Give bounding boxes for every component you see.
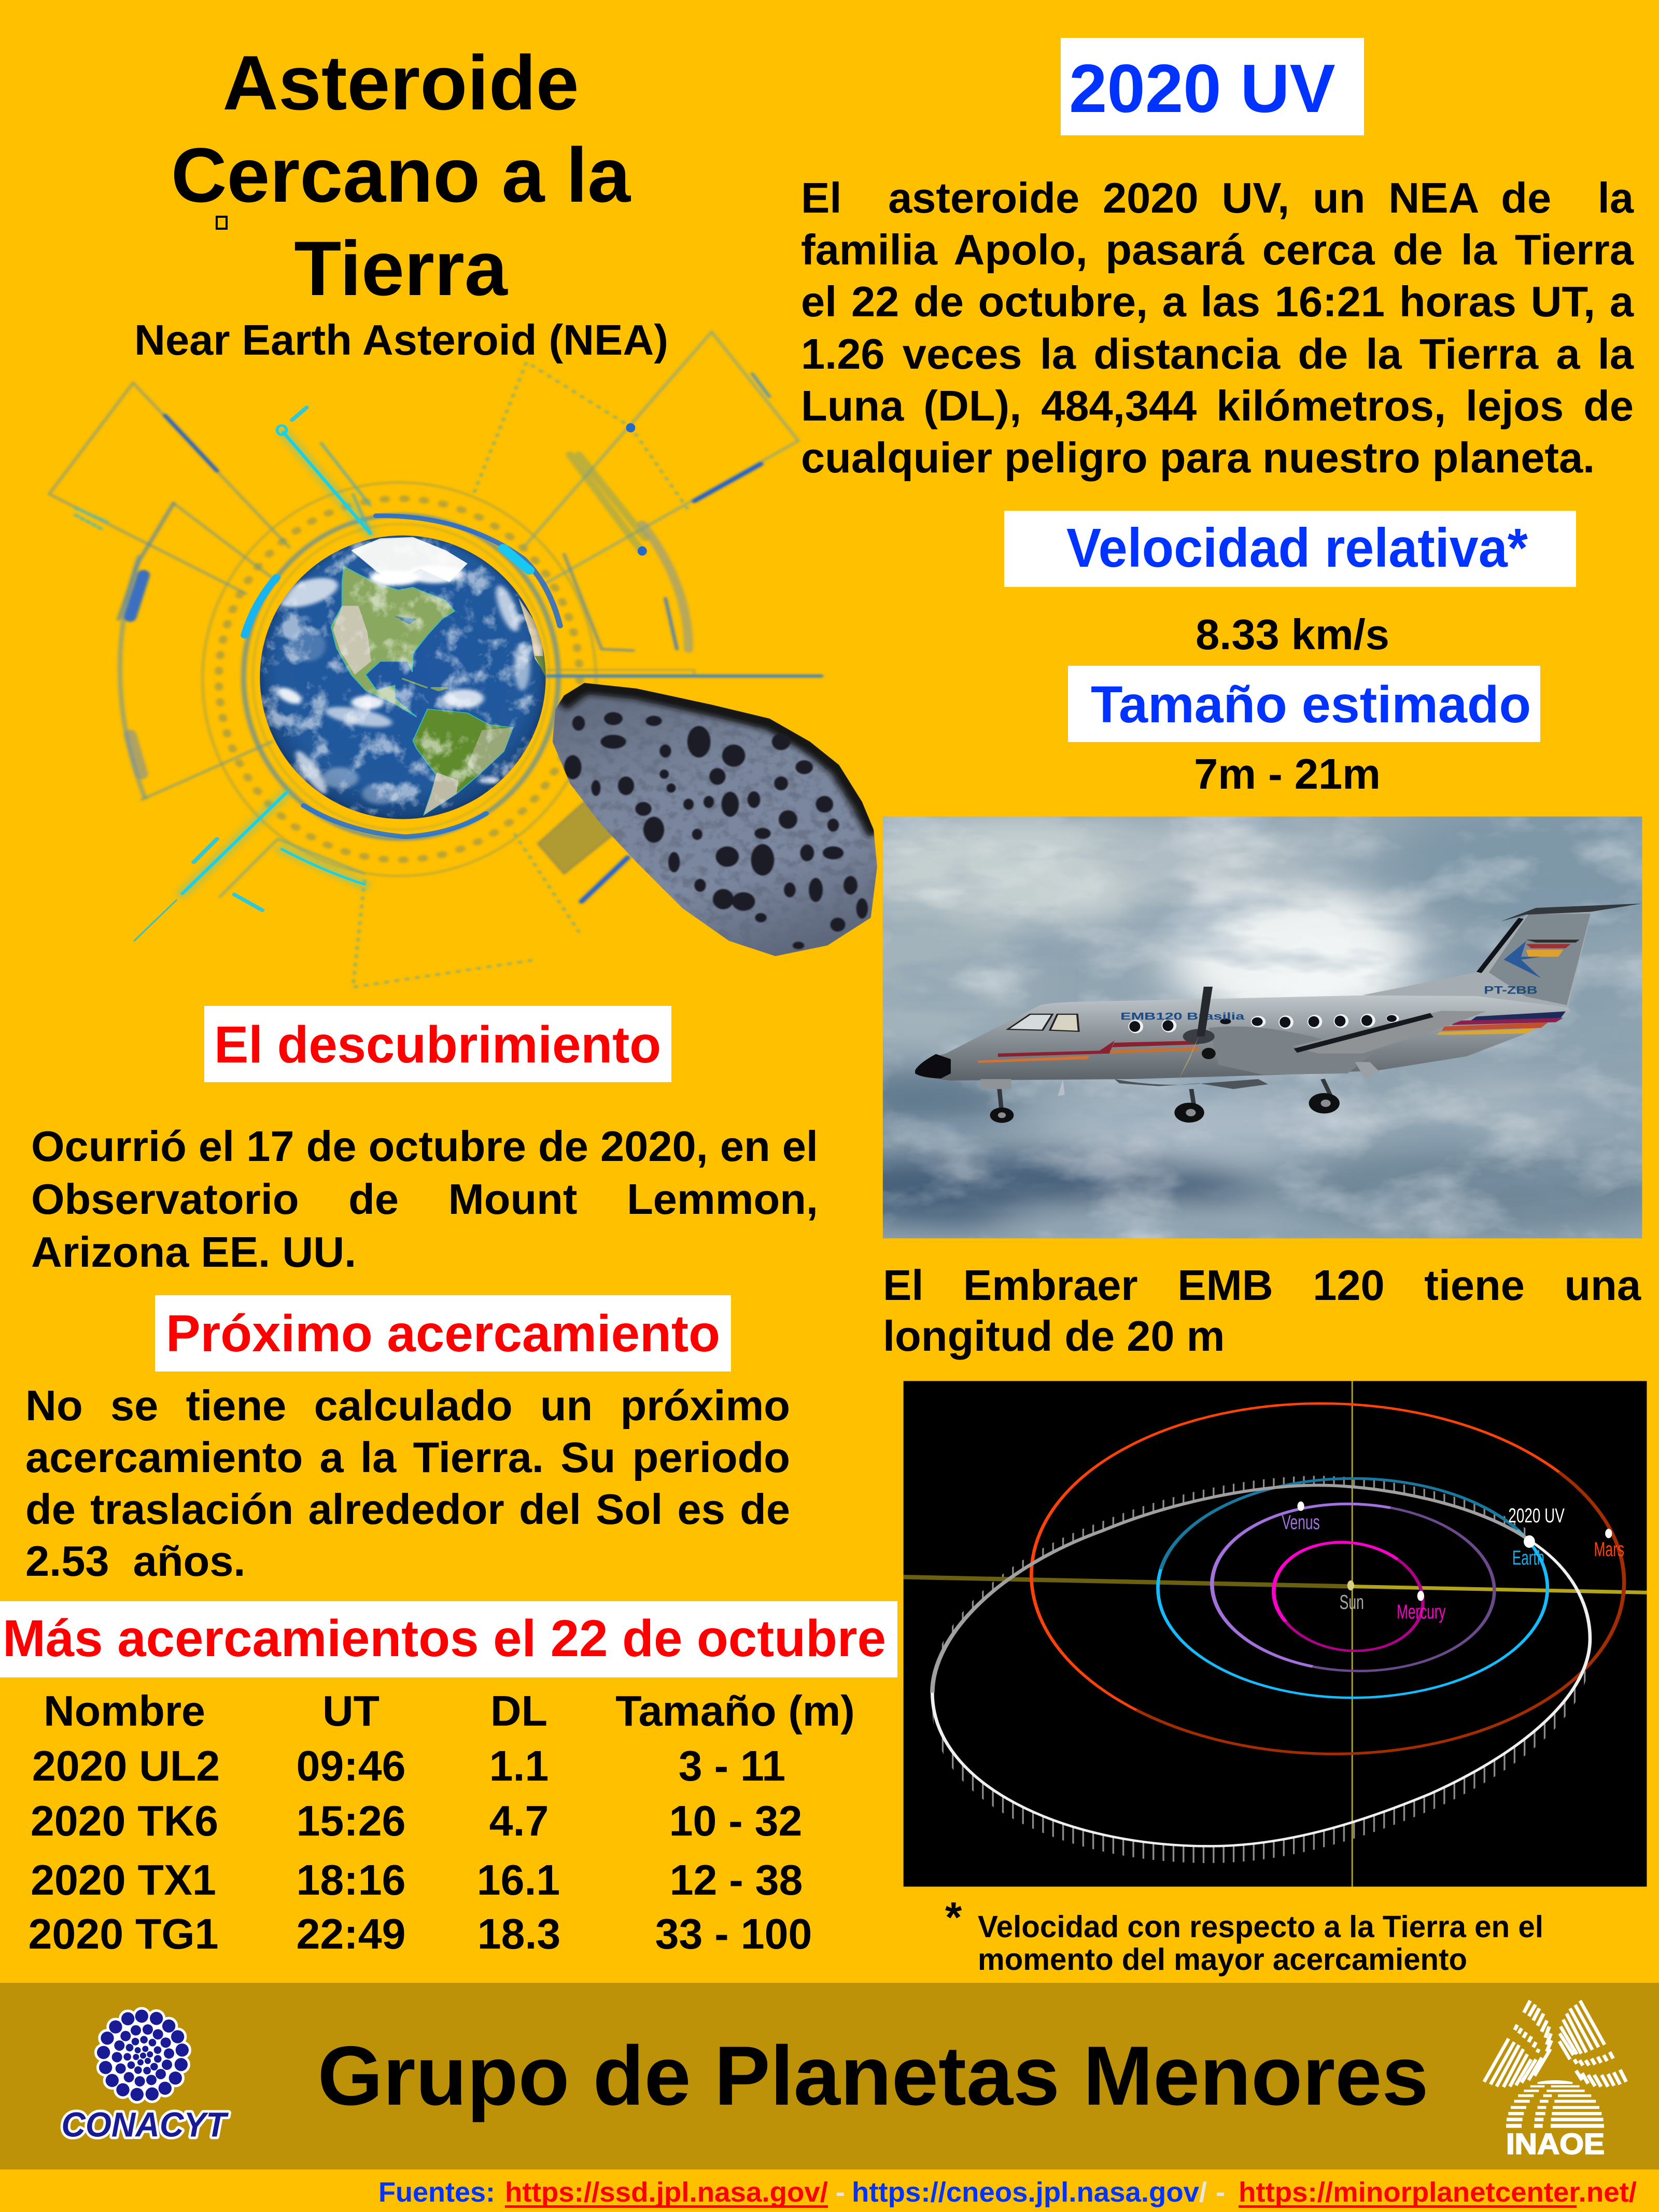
text block: next approach: No se tiene calculado un próximo	[25, 1381, 790, 1430]
row: 2020 TK6	[31, 1797, 802, 1845]
row: 2020 UL2	[32, 1742, 785, 1790]
heading: 2020 UV: 2020 UV	[1069, 50, 1335, 127]
orbit labels: Sun	[1340, 1591, 1364, 1614]
value: size: 7m - 21m	[1194, 750, 1381, 798]
subtitle: Near Earth Asteroid (NEA)	[134, 316, 668, 364]
row: 2020 UL2: 09:46	[296, 1742, 406, 1790]
text block: discovery: Observatorio de Mount Lemmon,	[31, 1175, 818, 1223]
stray placeholder glyph box	[217, 217, 227, 229]
heading: Velocidad relativa: Velocidad relativa*	[1066, 517, 1528, 579]
logo: INAOE	[1484, 2000, 1626, 2161]
value: velocity: 8.33 km/s	[1196, 610, 1389, 659]
logo dome stripes	[1506, 2080, 1604, 2128]
table header: DL	[490, 1687, 547, 1735]
orbit labels: Mercury	[1397, 1601, 1446, 1623]
orbit labels	[1282, 1504, 1624, 1623]
aircraft	[915, 904, 1641, 1123]
aircraft: PT-ZBB	[1484, 984, 1538, 996]
title: Cercano a la	[171, 132, 631, 218]
craters	[564, 712, 868, 949]
row: 2020 TX1: 18:16	[296, 1856, 406, 1904]
row: 2020 TG1: 33 - 100	[655, 1910, 812, 1958]
logo dots	[97, 2010, 189, 2101]
orbit: Earth	[1158, 1478, 1548, 1698]
text block: 2020 UV description: el 22 de octubre, a las 16:21 horas UT, a	[801, 277, 1634, 326]
row: 2020 TG1: 22:49	[296, 1910, 406, 1958]
landing gear	[1000, 1079, 1330, 1109]
clouds	[271, 537, 530, 804]
text block: 2020 UV description: familia Apolo, pasará cerca de la Tierra	[801, 226, 1634, 274]
footnote: Velocidad con respecto a la Tierra en el	[978, 1910, 1543, 1944]
rock texture	[553, 687, 876, 956]
title: Tierra	[294, 225, 508, 312]
row: 2020 TK6: 4.7	[489, 1797, 549, 1845]
logo wordmark: CONACYT	[61, 2106, 229, 2145]
caption: aircraft length	[883, 1261, 1641, 1360]
heading: Velocidad relativa	[1004, 511, 1576, 587]
row: 2020 UL2: 2020 UL2	[32, 1742, 220, 1790]
text block: next approach	[25, 1381, 790, 1585]
orbit labels: 2020 UV	[1508, 1504, 1565, 1527]
sources line: -	[1216, 2177, 1225, 2208]
table header: Nombre	[44, 1687, 205, 1735]
photo: Embraer EMB 120 aircraft	[762, 797, 1659, 1241]
icon: asteroid	[544, 677, 885, 964]
table header	[44, 1687, 855, 1735]
asteroid orbit height ticks	[932, 1476, 1590, 1863]
text block: discovery: Ocurrió el 17 de octubre de 2020, en el	[31, 1122, 818, 1170]
row: 2020 TG1	[29, 1910, 812, 1958]
text block: next approach: 2.53 años.	[25, 1537, 245, 1585]
sources line: https://ssd.jpl.nasa.gov/	[505, 2177, 828, 2208]
text block: discovery	[31, 1122, 818, 1276]
chart: orbit diagram	[904, 1381, 1647, 1887]
text block: 2020 UV description	[801, 174, 1634, 482]
footnote: momento del mayor acercamiento	[978, 1942, 1467, 1977]
row: 2020 TX1: 2020 TX1	[31, 1856, 216, 1904]
caption: aircraft length: El Embraer EMB 120 tiene una	[883, 1261, 1641, 1309]
illustration: futuristic HUD around Earth	[49, 332, 822, 987]
orbit: Mars	[1014, 1390, 1641, 1768]
icon: Earth globe	[249, 529, 555, 825]
turbulence cloud texture	[260, 537, 544, 818]
row: 2020 TX1: 12 - 38	[670, 1856, 803, 1904]
row: 2020 TX1	[31, 1856, 803, 1904]
sky clouds	[762, 797, 1659, 1241]
heading: Más acercamientos: Más acercamientos el 22 de octubre	[3, 1609, 886, 1668]
sources line: https://minorplanetcenter.net/	[1239, 2177, 1637, 2208]
sources line	[378, 2177, 1637, 2208]
orbit: Venus	[1198, 1493, 1508, 1682]
continents	[331, 566, 546, 815]
footnote: *	[945, 1893, 962, 1941]
text block: discovery: Arizona EE. UU.	[31, 1228, 356, 1276]
text block: 2020 UV description: cualquier peligro para nuestro planeta.	[801, 433, 1595, 482]
heading: Próximo acercamiento: Próximo acercamiento	[166, 1305, 720, 1363]
logo dots backing	[97, 2010, 189, 2101]
text block: 2020 UV description: El asteroide 2020 UV, un NEA de la	[801, 174, 1634, 222]
footer band	[0, 1983, 1659, 2169]
row: 2020 UL2: 1.1	[489, 1742, 549, 1790]
table header: UT	[322, 1687, 379, 1735]
text block: 2020 UV description: 1.26 veces la distancia de la Tierra a la	[801, 330, 1634, 378]
heading: El descubrimiento: El descubrimiento	[214, 1016, 661, 1074]
row: 2020 TG1: 18.3	[477, 1910, 560, 1958]
heading: 2020 UV	[1061, 38, 1364, 135]
heading: Tamaño estimado: Tamaño estimado	[1091, 676, 1531, 734]
row: 2020 TK6: 2020 TK6	[31, 1797, 218, 1845]
logo wordmark: INAOE	[1506, 2128, 1605, 2161]
title	[171, 39, 631, 312]
table: approaches on 22 October	[29, 1687, 855, 1958]
sources line: https://cneos.jpl.nasa.gov	[852, 2177, 1199, 2208]
HUD rings and frames	[49, 332, 822, 987]
orbit: 2020 UV	[932, 1485, 1590, 1846]
title: Asteroide	[222, 39, 579, 126]
orbit labels: Venus	[1282, 1511, 1320, 1534]
row: 2020 UL2: 3 - 11	[679, 1742, 785, 1790]
orbit labels: Earth	[1512, 1547, 1544, 1569]
HUD glowing cyan and blue arcs	[134, 408, 647, 941]
logo: CONACYT	[61, 2010, 229, 2145]
footnote	[945, 1893, 1543, 1977]
sources line: /	[1199, 2177, 1207, 2208]
row: 2020 TK6: 15:26	[296, 1797, 406, 1845]
row: 2020 TX1: 16.1	[477, 1856, 560, 1904]
chart: orbit diagram: Mars	[1594, 1538, 1624, 1561]
planet markers	[1297, 1502, 1612, 1601]
row: 2020 TG1: 2020 TG1	[29, 1910, 218, 1958]
sources line: -	[836, 2177, 845, 2208]
caption: aircraft length: longitud de 20 m	[883, 1312, 1225, 1360]
text block: next approach: de traslación alrededor del Sol es de	[25, 1485, 790, 1533]
row: 2020 TK6: 10 - 32	[669, 1797, 802, 1845]
sources line: Fuentes:	[378, 2177, 495, 2208]
text block: 2020 UV description: Luna (DL), 484,344 kilómetros, lejos de	[801, 382, 1634, 430]
reference axes	[904, 1577, 1352, 1587]
table header: Tamaño (m)	[615, 1687, 855, 1735]
aircraft: EMB120 Brasilia	[1120, 1011, 1245, 1022]
text block: next approach: acercamiento a la Tierra. Su periodo	[25, 1433, 790, 1481]
footer title: Grupo de Planetas Menores	[317, 2029, 1429, 2123]
orbit: Mercury	[1245, 1523, 1452, 1670]
logo wing stripes	[1484, 2000, 1626, 2087]
